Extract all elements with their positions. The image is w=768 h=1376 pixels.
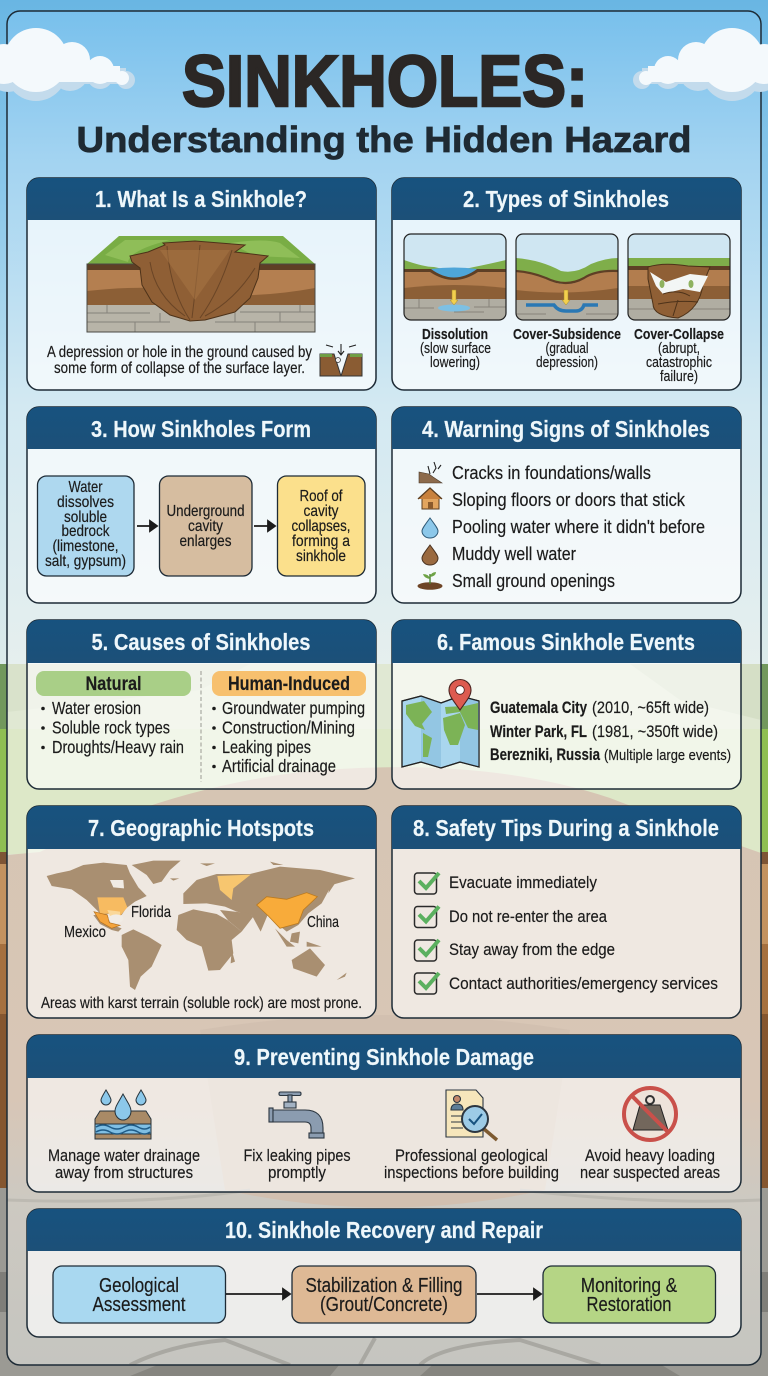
header: 6: [392, 620, 741, 663]
label: cover-collapse: failure): [660, 369, 698, 385]
natural list: Droughts/Heavy rain: [52, 737, 184, 757]
label: dissolution: Dissolution: [422, 326, 488, 343]
tip: loading: near suspected areas: [580, 1163, 720, 1182]
human-induced list: Construction/Mining: [222, 718, 355, 738]
header: 4: 4. Warning Signs of Sinkholes: [422, 416, 710, 442]
panel: 6 famous events: [392, 620, 741, 789]
event 1: Guatemala City: [490, 698, 587, 717]
header: 1: [27, 178, 376, 220]
map label: Florida: Florida: [131, 904, 171, 921]
map caption: Areas with karst terrain (soluble rock) are most prone.: [41, 995, 362, 1012]
tip: pipes: Fix leaking pipes: [244, 1146, 350, 1165]
header: 10: [27, 1209, 741, 1251]
label: dissolution: lowering): [430, 355, 480, 371]
header: 3: [27, 407, 376, 449]
label: cover-subsidence: (gradual: [546, 341, 588, 357]
event 1: (2010, ~65ft wide): [592, 698, 709, 717]
icon: cracks: [419, 462, 442, 483]
icon: muddy drop: [422, 545, 438, 565]
natural list: Water erosion: [52, 698, 141, 718]
natural heading: [36, 671, 191, 696]
step: monitoring: [543, 1266, 716, 1323]
step: stabilization: Stabilization & Filling: [306, 1275, 462, 1297]
natural list: Soluble rock types: [52, 718, 170, 738]
step: roof collapses: sinkhole: [296, 548, 346, 565]
tip: drainage: away from structures: [55, 1163, 193, 1182]
tip 1: [414, 873, 597, 894]
icon: folded map with pin: [402, 680, 479, 768]
subtitle: Understanding the Hidden Hazard: [76, 119, 692, 160]
natural list: [41, 698, 184, 757]
tip 4: Contact authorities/emergency services: [449, 974, 718, 993]
step: cavity enlarges: Underground: [166, 503, 244, 520]
step: cavity enlarges: [160, 476, 252, 576]
event 2: Winter Park, FL: [490, 722, 587, 741]
header: 6: 6. Famous Sinkhole Events: [437, 629, 695, 655]
cloud right: [633, 28, 768, 101]
event 1: [490, 698, 709, 717]
step: water dissolves bedrock: soluble: [64, 509, 107, 526]
icon: house: [418, 488, 442, 509]
event 2: (1981, ~350ft wide): [592, 722, 718, 741]
diagram: dissolution: [404, 234, 506, 320]
human-induced heading: Human-Induced: [228, 674, 350, 695]
header: 7: [27, 806, 376, 849]
tip 2: Do not re-enter the area: [449, 907, 607, 926]
tip 3: [414, 940, 615, 961]
arrow: [254, 521, 275, 531]
cloud left: [0, 28, 135, 101]
warning text 2: Sloping floors or doors that stick: [452, 490, 686, 510]
tip 3: Stay away from the edge: [449, 940, 615, 959]
step: water dissolves bedrock: (limestone,: [52, 538, 118, 555]
definition text: A depression or hole in the ground caused by: [47, 344, 312, 361]
illustration: sinkhole cross-section: [87, 236, 315, 332]
step: roof collapses: Roof of: [300, 488, 343, 505]
panel: 10 recovery and repair: [27, 1209, 741, 1337]
step: roof collapses: [278, 476, 365, 576]
header: 5: 5. Causes of Sinkholes: [92, 629, 310, 655]
warning text 4: Muddy well water: [452, 544, 576, 564]
panel: 1 what is a sinkhole: [27, 178, 376, 390]
tip: loading: Avoid heavy loading: [585, 1146, 715, 1165]
step: monitoring: Restoration: [586, 1294, 672, 1316]
tip: pipes: [244, 1146, 350, 1182]
step: cavity enlarges: enlarges: [180, 533, 232, 550]
title: SINKHOLES:: [182, 42, 588, 122]
header: 2: 2. Types of Sinkholes: [463, 186, 669, 212]
event 2: [490, 722, 718, 741]
icon: faucet: [269, 1092, 324, 1138]
tip: inspections: inspections before building: [384, 1163, 559, 1182]
human-induced list: Groundwater pumping: [222, 698, 365, 718]
header: 2: [392, 178, 741, 220]
world map: [47, 861, 355, 990]
icon: inspection document: [446, 1090, 497, 1140]
arrow: [477, 1289, 541, 1299]
header: 8: [392, 806, 741, 849]
step: water dissolves bedrock: dissolves: [57, 494, 114, 511]
label: cover-subsidence: depression): [536, 355, 598, 371]
step: roof collapses: collapses,: [292, 518, 350, 535]
step: water dissolves bedrock: [38, 476, 134, 576]
definition text: [47, 344, 312, 377]
panel: 8 safety tips: [392, 806, 741, 1018]
panel: 5 causes: [27, 620, 376, 789]
map label: China: China: [307, 914, 339, 931]
label: cover-collapse: (abrupt,: [658, 341, 700, 357]
human-induced list: Artificial drainage: [222, 756, 336, 776]
step: water dissolves bedrock: salt, gypsum): [45, 553, 126, 570]
label: cover-subsidence: Cover-Subsidence: [513, 326, 621, 343]
arrow: [226, 1289, 290, 1299]
event 3: (Multiple large events): [604, 747, 731, 764]
step: assessment: Geological: [99, 1275, 179, 1297]
step: roof collapses: cavity: [304, 503, 338, 520]
event 3: [490, 745, 731, 764]
natural heading: Natural: [86, 674, 142, 695]
human-induced list: Leaking pipes: [222, 737, 311, 757]
tip: loading: [580, 1146, 720, 1182]
header: 5: [27, 620, 376, 663]
step: assessment: Assessment: [92, 1294, 186, 1316]
step: assessment: [53, 1266, 226, 1323]
tip: inspections: [384, 1146, 559, 1182]
tip: pipes: promptly: [268, 1163, 326, 1182]
icon: water drainage: [95, 1090, 151, 1139]
header: 9: [27, 1035, 741, 1078]
label: dissolution: (slow surface: [420, 341, 491, 357]
step: roof collapses: forming a: [292, 533, 350, 550]
label: cover-collapse: [634, 326, 724, 385]
panel: 7 hotspots: [27, 806, 376, 1018]
tip: inspections: Professional geological: [395, 1146, 548, 1165]
panel: 2 types of sinkholes: [392, 178, 741, 390]
header: 1: 1. What Is a Sinkhole?: [95, 186, 307, 212]
tip 2: [414, 906, 607, 928]
icon: no heavy load: [624, 1088, 676, 1140]
panel: 4 warning signs: [392, 407, 741, 603]
step: water dissolves bedrock: bedrock: [62, 523, 110, 540]
panel: 9 preventing damage: [27, 1035, 741, 1192]
label: cover-collapse: catastrophic: [646, 355, 712, 371]
event 3: Berezniki, Russia: [490, 745, 600, 764]
step: water dissolves bedrock: Water: [68, 479, 103, 496]
label: cover-subsidence: [513, 326, 621, 371]
definition text: some form of collapse of the surface layer.: [54, 360, 305, 377]
diagram: cover-subsidence: [516, 234, 618, 320]
panel: 3 how sinkholes form: [27, 407, 376, 603]
arrow: [137, 521, 157, 531]
human-induced list: [212, 698, 365, 776]
map label: Mexico: Mexico: [64, 924, 106, 941]
step: monitoring: Monitoring &: [581, 1275, 678, 1297]
step: cavity enlarges: cavity: [188, 518, 223, 535]
header: 4: [392, 407, 741, 449]
warning text 5: Small ground openings: [452, 571, 615, 591]
icon: water drop: [422, 518, 438, 538]
warning text 1: Cracks in foundations/walls: [452, 463, 651, 483]
diagram: cover-collapse: [628, 234, 730, 320]
label: dissolution: [420, 326, 491, 371]
step: stabilization: [292, 1266, 476, 1323]
icon: small collapse: [320, 344, 362, 376]
tip: drainage: Manage water drainage: [48, 1146, 200, 1165]
header: 8: 8. Safety Tips During a Sinkhole: [413, 815, 719, 841]
warning text 3: Pooling water where it didn't before: [452, 517, 705, 537]
header: 7: 7. Geographic Hotspots: [88, 815, 314, 841]
header: 10: 10. Sinkhole Recovery and Repair: [225, 1217, 543, 1243]
header: 9: 9. Preventing Sinkhole Damage: [234, 1044, 534, 1070]
step: stabilization: (Grout/Concrete): [320, 1294, 448, 1316]
header: 3: 3. How Sinkholes Form: [91, 416, 311, 442]
tip: drainage: [48, 1146, 200, 1182]
tip 1: Evacuate immediately: [449, 873, 597, 892]
icon: ground opening: [418, 572, 442, 590]
label: cover-collapse: Cover-Collapse: [634, 326, 724, 343]
